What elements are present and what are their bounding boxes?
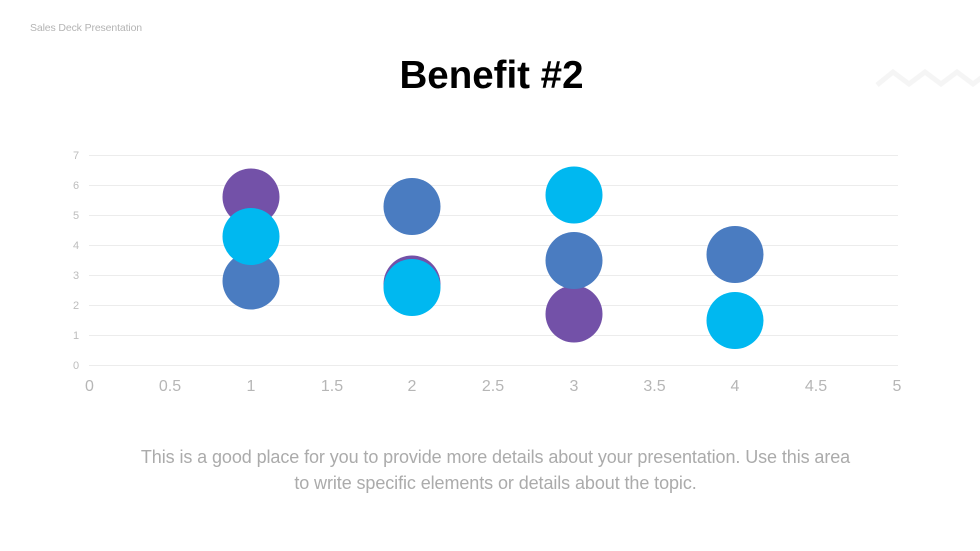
x axis labels (85, 378, 902, 395)
y axis labels: 3 (73, 270, 79, 282)
x axis labels: 5 (893, 378, 902, 395)
title: Benefit #2 (399, 54, 584, 97)
x axis labels: 2 (408, 378, 417, 395)
y axis labels: 1 (73, 330, 79, 342)
y axis labels: 6 (73, 180, 79, 192)
x axis labels: 3 (570, 378, 579, 395)
x axis labels: 0.5 (159, 378, 181, 395)
y axis labels: 5 (73, 210, 79, 222)
body text: to write specific elements or details about the topic. (294, 473, 697, 493)
body text (141, 447, 850, 493)
x axis labels: 2.5 (482, 378, 504, 395)
y axis labels: 7 (73, 150, 79, 162)
y axis labels (73, 150, 79, 372)
cyan series (222, 166, 764, 349)
y axis labels: 4 (73, 240, 79, 252)
x axis labels: 0 (85, 378, 94, 395)
body text: This is a good place for you to provide more details about your presentation. Use this area (141, 447, 850, 467)
header label: Sales Deck Presentation (30, 22, 142, 34)
y axis labels: 0 (73, 360, 79, 372)
x axis labels: 1 (247, 378, 256, 395)
y axis labels: 2 (73, 300, 79, 312)
scatter chart (73, 150, 902, 395)
x axis labels: 1.5 (321, 378, 343, 395)
blue series (222, 178, 764, 310)
x axis labels: 3.5 (643, 378, 666, 395)
purple series (222, 168, 602, 342)
zigzag line (877, 72, 980, 85)
x axis labels: 4 (731, 378, 740, 395)
x axis labels: 4.5 (805, 378, 827, 395)
